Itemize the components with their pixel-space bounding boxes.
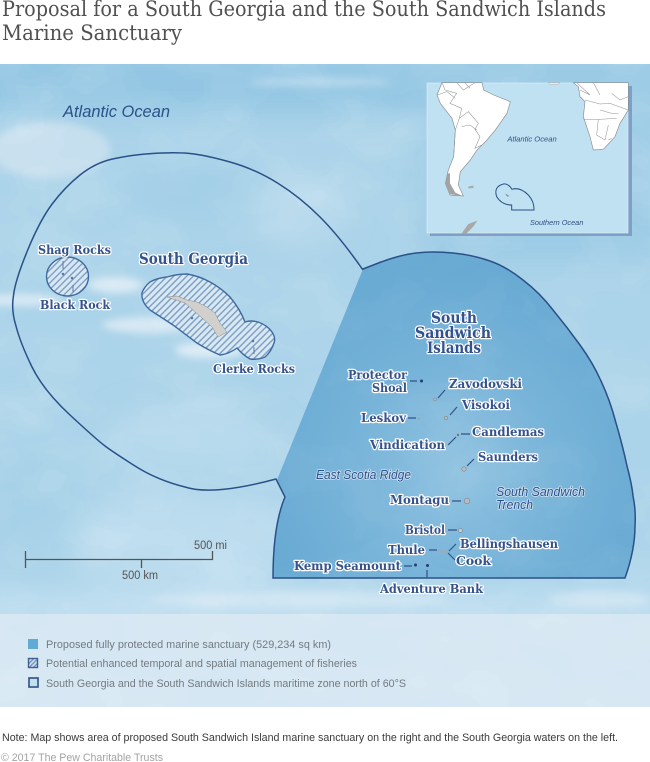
label: Protector Shoal: Protector — [348, 367, 407, 382]
sanctuary area — [270, 250, 640, 580]
label: Candlemas: Candlemas — [472, 424, 544, 439]
label: Shag Rocks: Shag Rocks — [38, 242, 111, 257]
label: Protector Shoal: Shoal — [372, 380, 407, 395]
label: Montagu: Montagu — [390, 492, 449, 507]
island markers and leaders — [404, 380, 474, 578]
scale bar: 500 mi — [194, 540, 227, 552]
label: South Sandwich Trench — [496, 485, 585, 512]
scale bar: 500 km — [122, 570, 158, 582]
label: Protector Shoal — [348, 367, 407, 395]
inset: South America borders — [437, 83, 482, 157]
label: East Scotia Ridge: East Scotia Ridge — [316, 468, 411, 482]
panel: ocean map — [0, 50, 650, 630]
label: Adventure Bank: Adventure Bank — [379, 581, 483, 596]
label: Thule: Thule — [388, 542, 425, 557]
label: South Sandwich Islands — [415, 308, 491, 357]
inset: North African coast fragment — [548, 83, 560, 85]
legend text: fisheries: Potential enhanced temporal and spatial management of fisheries — [46, 658, 357, 670]
scale bar — [26, 540, 227, 582]
inset: Africa — [573, 83, 628, 150]
inset: Africa borders — [577, 83, 628, 140]
inset: zone outline — [496, 184, 534, 210]
label: South Sandwich Islands: Islands — [427, 338, 481, 357]
panel: legend — [0, 614, 650, 707]
inset: islands — [505, 193, 509, 197]
South Georgia hatched area — [142, 274, 275, 359]
maritime zone boundary — [13, 153, 635, 578]
inset: Falklands and Antarctic Peninsula — [462, 186, 477, 233]
label: Kemp Seamount: Kemp Seamount — [294, 558, 401, 573]
note: Note: Map shows area of proposed South Sandwich Island marine sanctuary on the right and the South Georgia waters on the left. — [2, 732, 618, 744]
label: South Sandwich Trench: South Sandwich — [496, 485, 585, 499]
label: Saunders: Saunders — [478, 449, 538, 464]
label: South Sandwich Islands: South — [431, 308, 477, 327]
Shag Rocks hatched area — [46, 257, 88, 296]
legend swatch: fisheries — [28, 658, 38, 668]
inset label: Atlantic Ocean: Atlantic Ocean — [506, 134, 557, 143]
legend text: sanctuary: Proposed fully protected marine sanctuary (529,234 sq km) — [46, 639, 331, 651]
label: Clerke Rocks: Clerke Rocks — [213, 361, 295, 376]
inset: Tierra del Fuego coast — [445, 173, 463, 196]
legend swatch: maritime zone — [29, 678, 38, 687]
inset: South America — [437, 83, 510, 196]
label: South Sandwich Islands: Sandwich — [415, 323, 491, 342]
label: Bristol: Bristol — [405, 522, 445, 537]
label: Visokoi: Visokoi — [461, 397, 510, 412]
label: Atlantic Ocean: Atlantic Ocean — [62, 102, 170, 121]
South Georgia island — [167, 296, 227, 337]
label: Leskov: Leskov — [361, 410, 407, 425]
legend text: maritime zone: South Georgia and the South Sandwich Islands maritime zone north of 60°S — [46, 678, 406, 690]
leader marks: rocks — [62, 261, 254, 354]
inset locator map — [427, 83, 632, 236]
label: Zavodovski: Zavodovski — [449, 376, 522, 391]
title — [2, 0, 606, 46]
inset label: Southern Ocean: Southern Ocean — [530, 218, 583, 227]
label: Bellingshausen: Bellingshausen — [460, 536, 558, 551]
label: Vindication: Vindication — [369, 437, 445, 452]
label: South Georgia: South Georgia — [139, 249, 248, 268]
legend swatch: sanctuary — [28, 639, 38, 649]
title: Marine Sanctuary — [2, 21, 183, 46]
label: Black Rock: Black Rock — [40, 297, 110, 312]
label: Cook: Cook — [456, 553, 491, 568]
label: South Sandwich Trench: Trench — [496, 498, 533, 512]
